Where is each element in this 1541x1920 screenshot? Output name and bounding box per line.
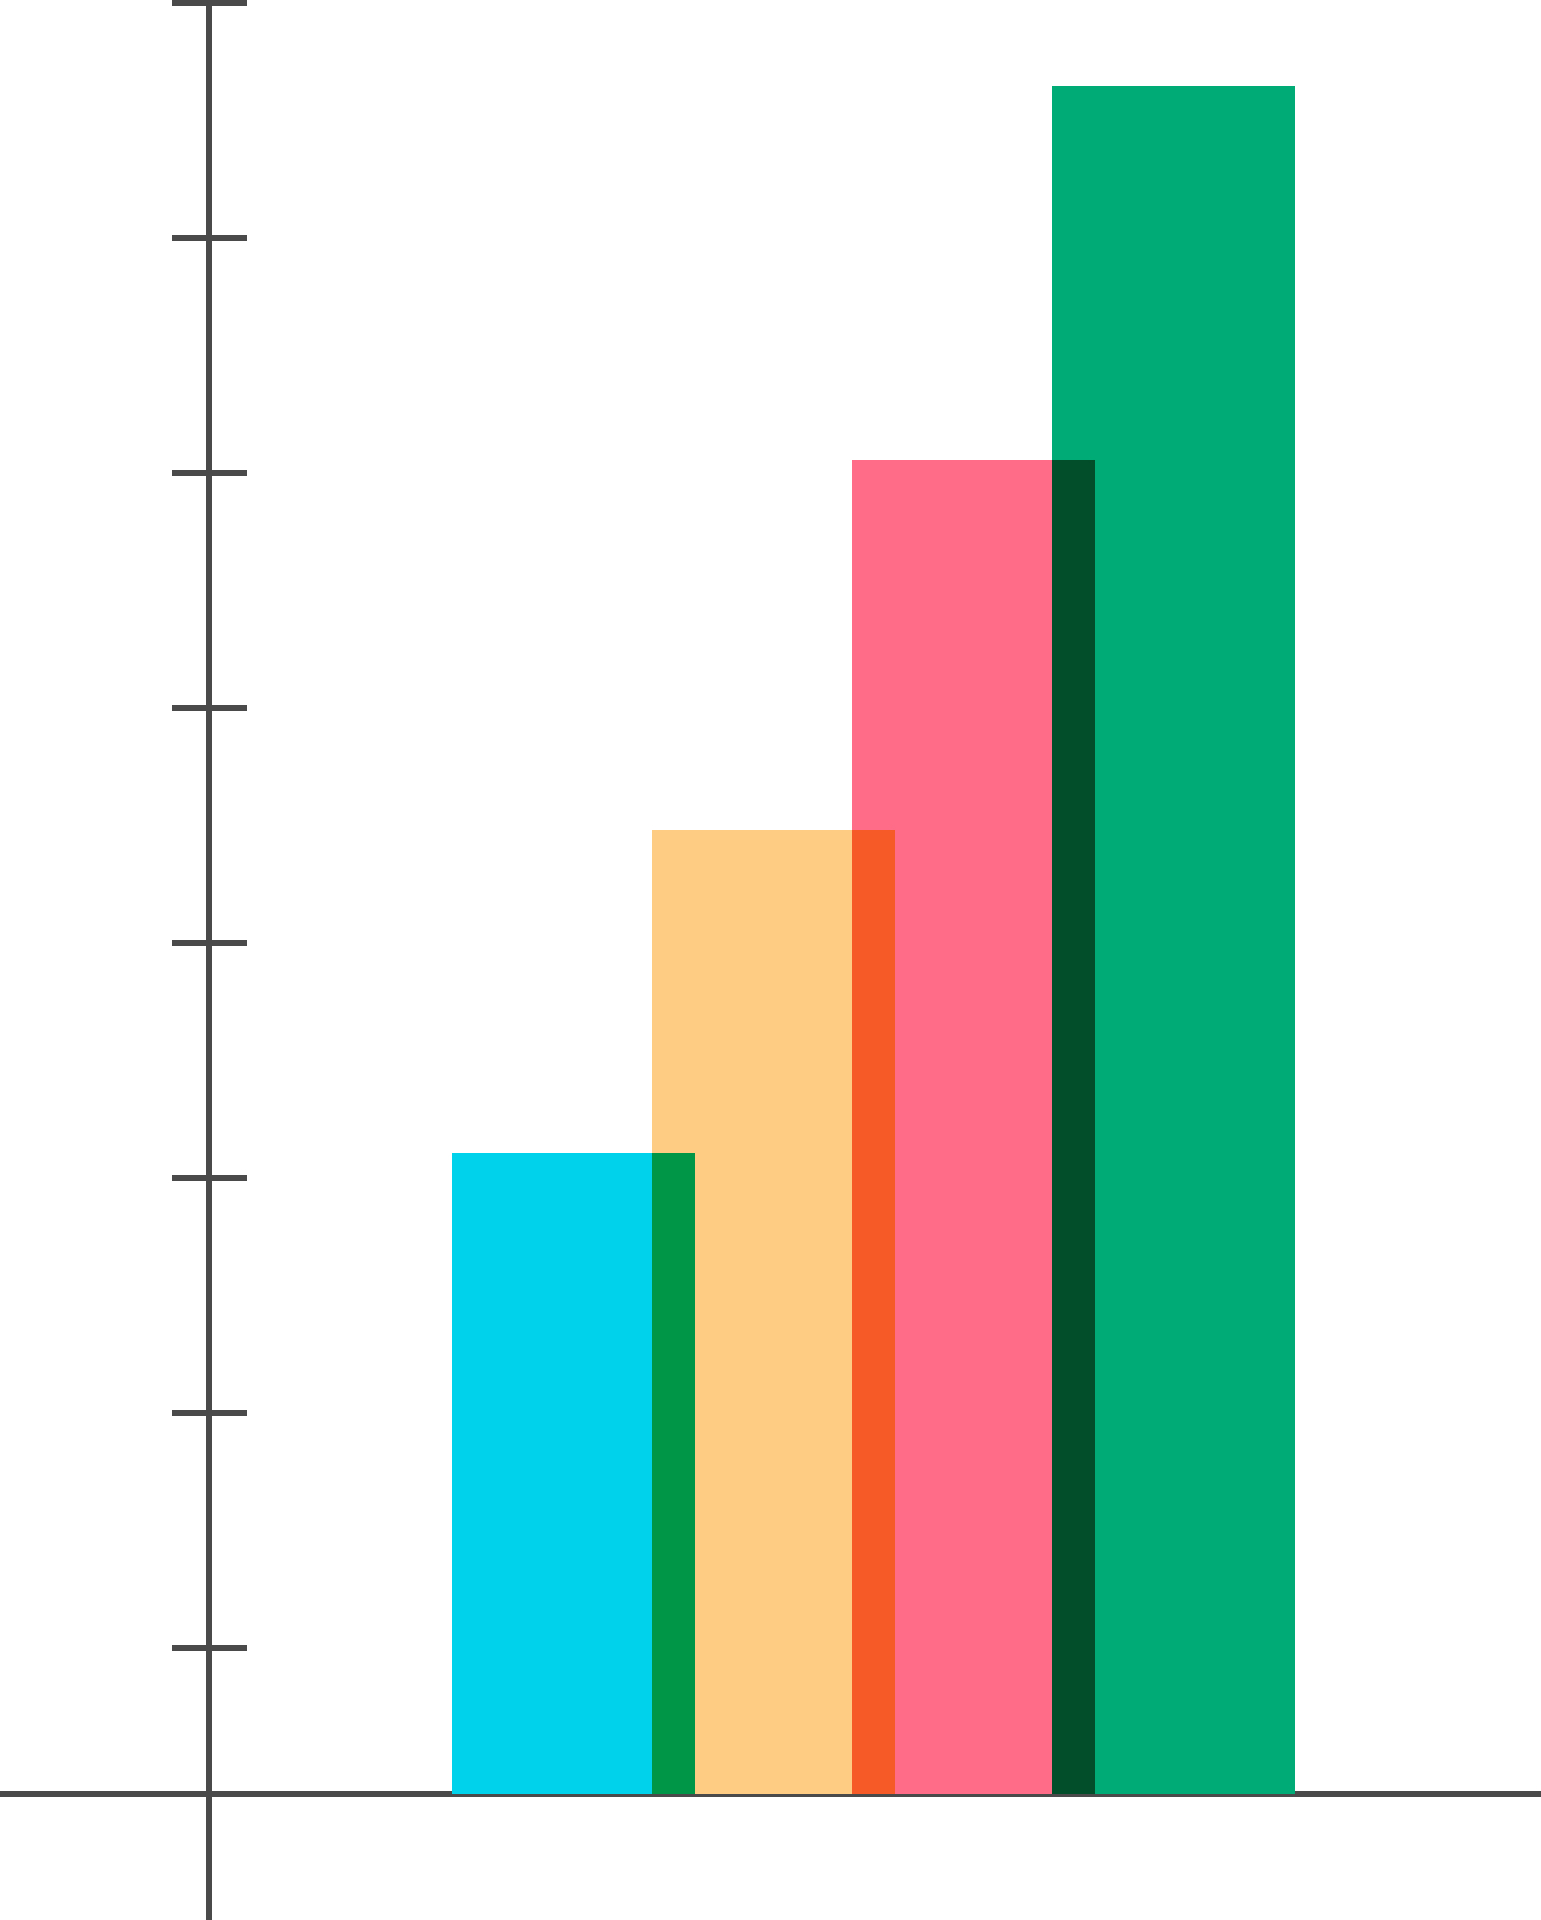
overlap: pink and green xyxy=(1052,460,1095,1794)
bar 2: orange xyxy=(652,830,852,1794)
bar 3: pink xyxy=(852,460,1052,1794)
bar 1: cyan xyxy=(452,1153,652,1794)
x axis xyxy=(0,1791,1541,1797)
overlap: cyan and orange xyxy=(652,1153,695,1794)
overlap: orange and pink xyxy=(852,830,895,1794)
y axis with tick marks xyxy=(172,0,247,1920)
bar 4: green xyxy=(1052,86,1295,1794)
